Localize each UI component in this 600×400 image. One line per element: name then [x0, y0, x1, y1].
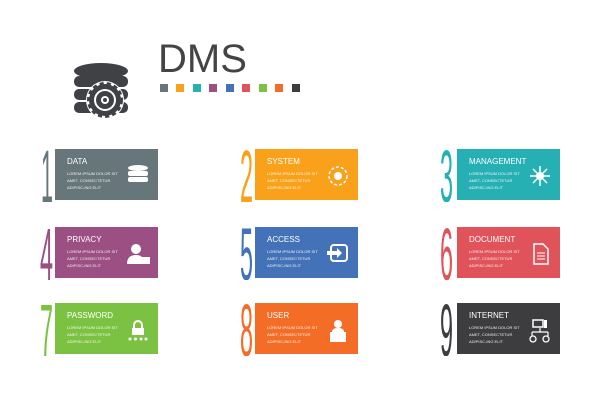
panel: 3 management: MANAGEMENT — [469, 157, 526, 166]
title: DMS — [158, 37, 247, 81]
icon: gear network — [328, 166, 348, 186]
panel: 1 data: LOREM IPSUM DOLOR SIT AMET, CONSECTETUR ADIPISC-ING ELIT — [67, 171, 118, 190]
icon: database — [128, 165, 148, 182]
panel: 8 user — [240, 301, 358, 356]
panel: 2 system — [240, 147, 358, 202]
icon: user lock — [127, 244, 150, 264]
panel: 6 document: DOCUMENT — [469, 235, 515, 244]
panel: 1 data: DATA — [67, 157, 87, 166]
icon: document — [533, 243, 549, 265]
panel: 3 management — [440, 147, 560, 202]
panel: 9 internet — [440, 301, 560, 356]
icon: user laptop — [330, 320, 346, 342]
panel: 4 privacy: LOREM IPSUM DOLOR SIT AMET, CONSECTETUR ADIPISC-ING ELIT — [67, 249, 118, 268]
panel: 7 password: PASSWORD — [67, 311, 113, 320]
panel: 9 internet: INTERNET — [469, 311, 509, 320]
icon: enter arrow — [327, 244, 348, 262]
icon: hub — [530, 166, 550, 186]
panel: 5 access: ACCESS — [267, 235, 300, 244]
panel: 7 password: LOREM IPSUM DOLOR SIT AMET, CONSECTETUR ADIPISC-ING ELIT — [67, 325, 118, 344]
panel: 6 document — [440, 225, 560, 280]
panel: 8 user: USER — [267, 311, 289, 320]
panel: 1 data — [41, 147, 158, 202]
panel: 8 user: LOREM IPSUM DOLOR SIT AMET, CONSECTETUR ADIPISC-ING ELIT — [267, 325, 318, 344]
panel: 9 internet: LOREM IPSUM DOLOR SIT AMET, CONSECTETUR ADIPISC-ING ELIT — [469, 325, 520, 344]
panel: 5 access — [240, 225, 358, 280]
panel: 3 management: LOREM IPSUM DOLOR SIT AMET, CONSECTETUR ADIPISC-ING ELIT — [469, 171, 520, 190]
panel: 5 access: LOREM IPSUM DOLOR SIT AMET, CONSECTETUR ADIPISC-ING ELIT — [267, 249, 318, 268]
panel: 4 privacy: PRIVACY — [67, 235, 102, 244]
icon: network — [529, 319, 550, 343]
panel: 2 system: SYSTEM — [267, 157, 300, 166]
icon: padlock — [128, 320, 148, 340]
icon: database gear — [74, 63, 128, 118]
panel: 2 system: LOREM IPSUM DOLOR SIT AMET, CONSECTETUR ADIPISC-ING ELIT — [267, 171, 318, 190]
panel: 4 privacy — [40, 225, 158, 280]
panel: 7 password — [40, 301, 158, 356]
panel: 6 document: LOREM IPSUM DOLOR SIT AMET, CONSECTETUR ADIPISC-ING ELIT — [469, 249, 520, 268]
color legend squares — [160, 84, 300, 92]
